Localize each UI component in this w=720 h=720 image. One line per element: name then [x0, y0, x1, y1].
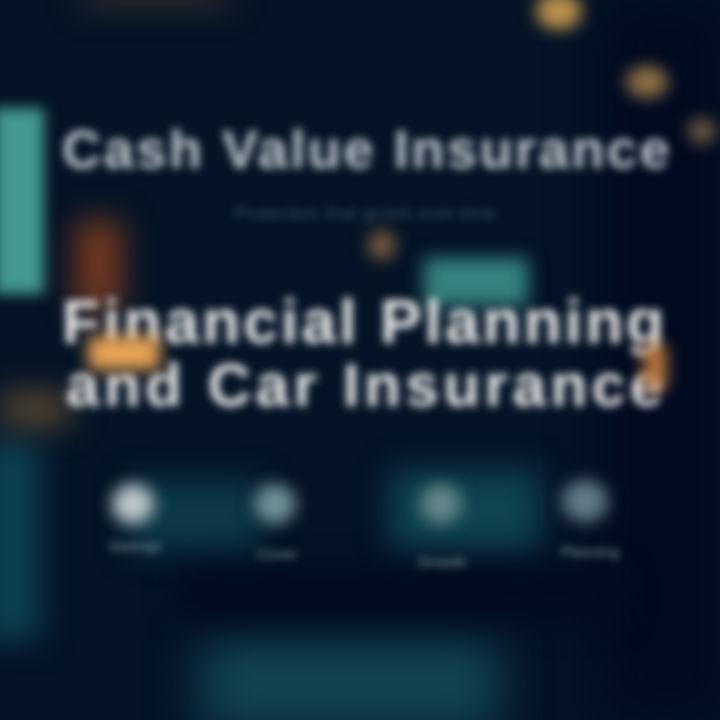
title: Cash Value Insurance — [62, 120, 672, 180]
orange highlight right — [644, 345, 666, 389]
main heading: and Car Insurance — [66, 352, 668, 419]
orange highlight — [88, 336, 160, 370]
icon: growth — [420, 484, 462, 524]
feature item: planning: Planning — [561, 544, 619, 561]
feature item: savings: Savings — [108, 538, 162, 555]
feature item: planning — [553, 470, 622, 563]
feature item: savings — [100, 472, 165, 557]
main heading — [58, 288, 668, 419]
main heading: Financial Planning — [62, 288, 667, 357]
teal accent block — [424, 258, 528, 306]
feature item: growth: Growth — [418, 554, 466, 571]
feature item: cover: Cover — [257, 546, 297, 563]
icon: cover — [254, 484, 296, 524]
icon: savings — [112, 484, 154, 524]
feature item: cover — [245, 474, 306, 563]
feature item: growth — [412, 475, 470, 571]
teal side panel — [0, 108, 44, 294]
icon: planning — [562, 480, 608, 522]
subtitle: Protection that grows over time — [234, 204, 496, 225]
